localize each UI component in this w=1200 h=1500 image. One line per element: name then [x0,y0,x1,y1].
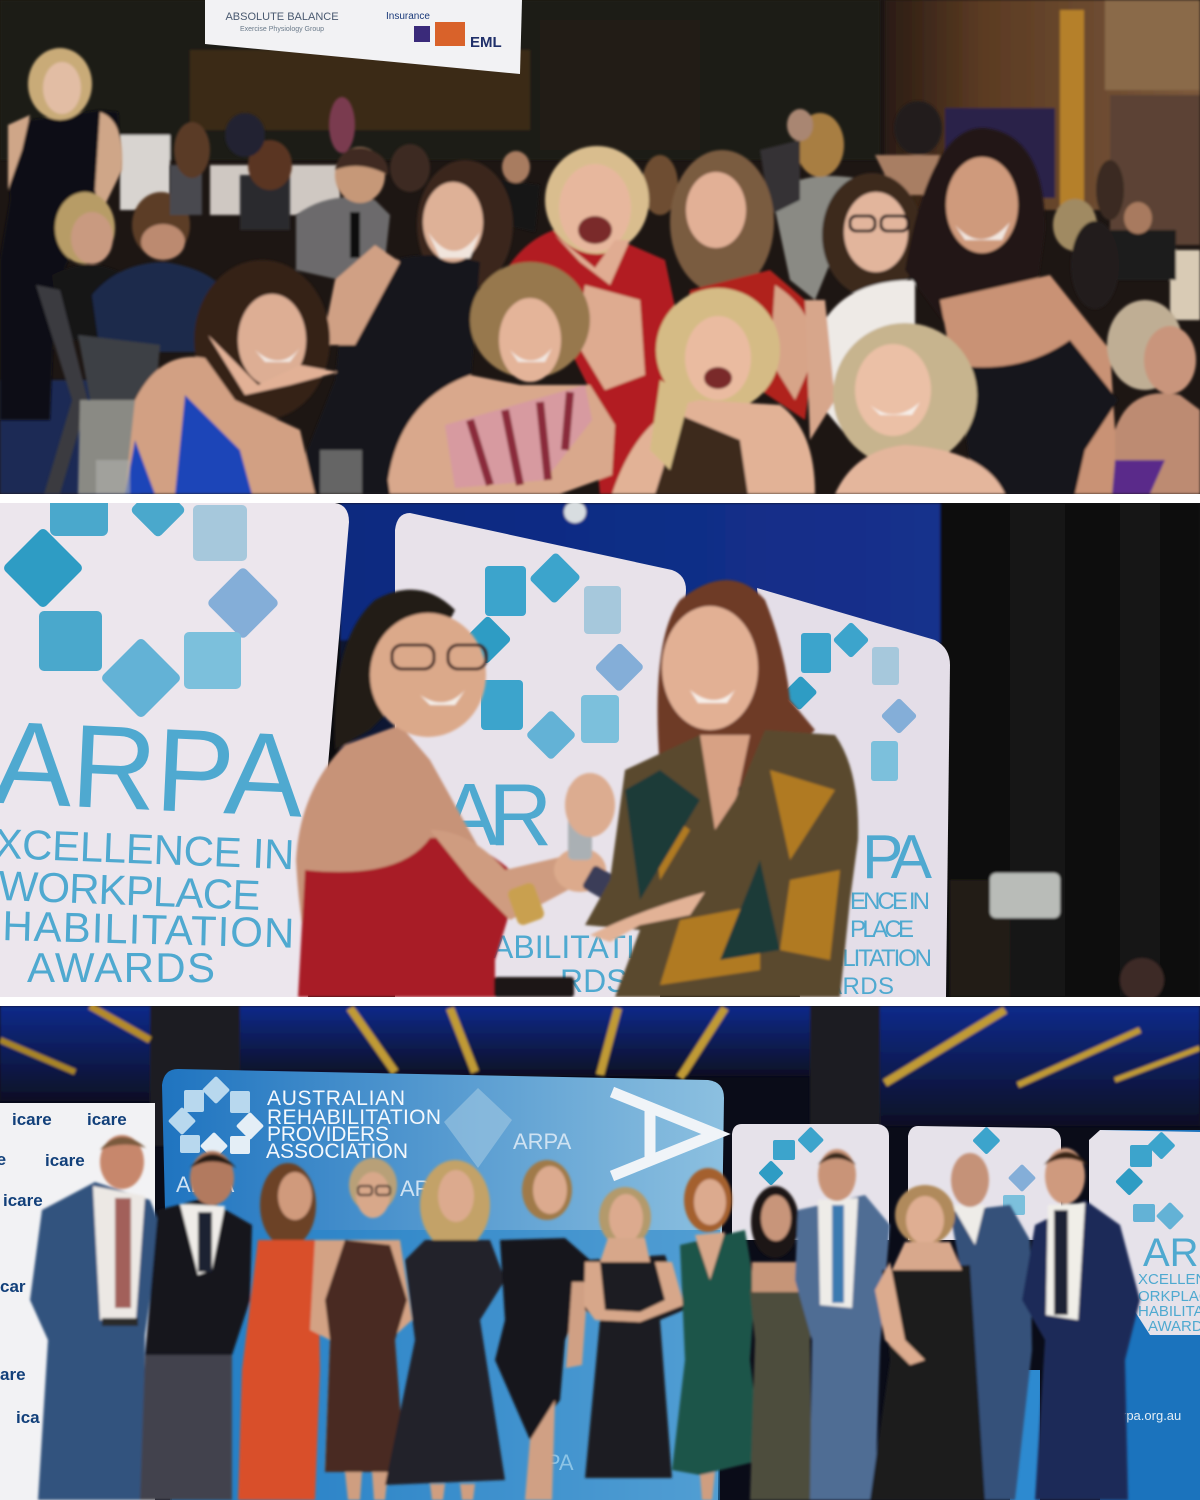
small ARPA banners on the right [732,1124,1200,1500]
banner: ARPA right: BILITATION [824,945,932,972]
stage ceiling and lights [0,1006,1200,1146]
man behind in navy suit [950,1153,1032,1500]
photo: award presentation [0,482,1200,1002]
woman in striped dress [388,262,615,494]
man in blue suit, striped tie [795,1149,890,1500]
woman in red, long brown hair [670,150,815,420]
woman far right in purple [1107,300,1200,494]
banner: icare sponsor wall: icare [87,1110,127,1129]
trophy [566,821,612,899]
woman in brown dress [612,288,815,494]
woman with glasses, white top [805,173,922,440]
banner: Australian Rehabilitation Providers Association [162,1069,724,1500]
blonde woman front right [833,323,1005,494]
banner: ARPA left: AWARDS [27,944,215,991]
banner: Australian Rehabilitation Providers Association: AUSTRALIAN [267,1087,405,1110]
banner: ARPA centre: RDS [560,963,628,999]
banner: icare sponsor wall: icare [45,1151,85,1170]
banner: Australian Rehabilitation Providers Association: ASSOCIATION [266,1140,408,1163]
woman in green wrap dress [672,1168,762,1500]
banner: ARPA left: ARPA [0,697,307,843]
venue background [0,0,1200,494]
woman with dark hair, black off-shoulder dress [905,128,1118,494]
woman in black one-shoulder dress [495,1160,590,1500]
woman in blue, hands raised [96,260,362,494]
woman in red strapless dress with glasses [296,590,606,997]
banner: ARPA left [0,482,349,997]
banner: Australian Rehabilitation Providers Association: RPA [530,1450,574,1475]
stage background [340,501,1200,1002]
small ARPA banners on the right: rpa.org.au [1122,1408,1181,1423]
woman in black lace, grey blonde hair [870,1185,985,1500]
seated guests at back left [52,147,390,352]
man in navy suit, spotted tie [1022,1148,1140,1500]
banner: icare sponsor wall: icare [12,1110,52,1129]
event screen: Exercise Physiology Group [240,26,324,33]
banner: icare sponsor wall: are [0,1365,26,1384]
woman in orange dress [238,1163,320,1500]
banner: Australian Rehabilitation Providers Association: ARPA [176,1172,235,1197]
man in black jacket [140,1151,252,1500]
banner: ARPA left: HABILITATION [2,902,295,957]
banner: ARPA centre [395,513,686,999]
banner: ARPA right: ARDS [826,973,894,1000]
event screen [205,0,522,74]
chairs [36,165,290,494]
banner: Australian Rehabilitation Providers Association: PROVIDERS [267,1123,389,1146]
background standing women [174,97,942,300]
banner: ARPA centre: ABILITATION [492,929,683,965]
woman in olive off-shoulder dress [750,1186,818,1500]
banner: icare sponsor wall: car [0,1277,26,1296]
woman in black sleeveless dress [584,1187,684,1478]
photo: award winners on stage [0,1006,1200,1500]
banner: icare sponsor wall: ica [16,1408,40,1427]
banner: ARPA left: WORKPLACE [0,862,261,919]
banner: ARPA right: PA [862,823,933,892]
photo: gala dinner table group [0,0,1200,494]
event screen: EML [470,34,502,51]
banner: Australian Rehabilitation Providers Association: REHABILITATION [267,1106,441,1129]
event screen: ABSOLUTE BALANCE [225,11,339,23]
woman in black lace dress [385,1160,505,1500]
man in blue suit, floral tie [30,1135,160,1500]
banner: Australian Rehabilitation Providers Association: RPA [178,1416,222,1441]
banner: ARPA centre: AR [440,765,552,864]
banner: Australian Rehabilitation Providers Association: AR [400,1176,431,1201]
banner: icare sponsor wall: icare [3,1191,43,1210]
standing woman in black [0,48,122,420]
woman with glasses, black top [290,160,513,494]
banner: icare sponsor wall [0,1103,155,1500]
woman in floral dress with auburn hair [565,580,858,997]
woman in red, hands on face [500,146,682,494]
banner: ARPA right: PLACE [850,916,914,943]
banner: ARPA right: ENCE IN [850,888,930,915]
banner: ARPA left: XCELLENCE IN [0,820,295,878]
banner: ARPA right [757,588,950,1000]
event screen: Insurance [386,11,430,22]
woman in brown halter dress [310,1158,412,1500]
banner: Australian Rehabilitation Providers Association: ARPA [513,1129,572,1154]
